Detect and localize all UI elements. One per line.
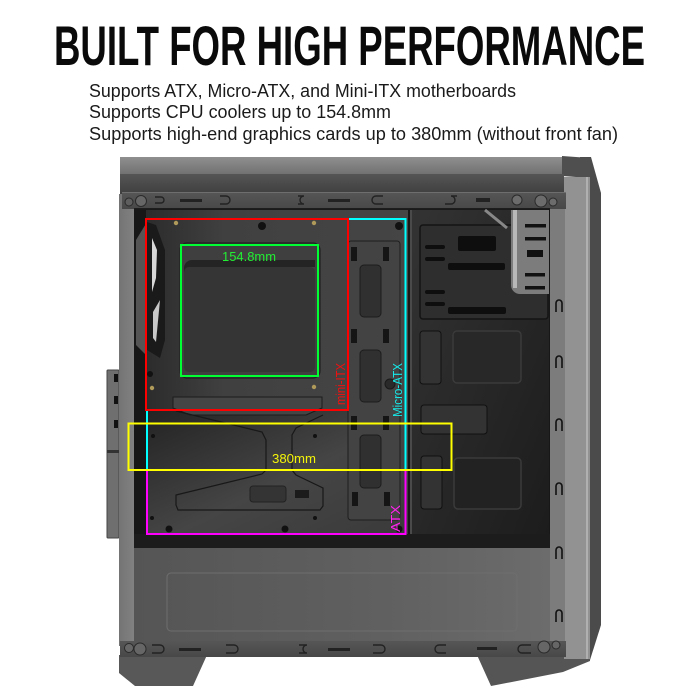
CPU cutout xyxy=(180,243,320,378)
Micro-ATX outline xyxy=(147,219,406,470)
feature: motherboards: Supports ATX, Micro-ATX, and Mini-ITX motherboards xyxy=(89,81,516,101)
top panel xyxy=(120,157,562,176)
ATX outline xyxy=(147,470,406,534)
right foot xyxy=(477,655,590,686)
CPU cooler outline xyxy=(181,245,318,376)
left foot xyxy=(119,655,207,686)
bottom rail xyxy=(120,641,566,657)
graphics card outline xyxy=(128,424,452,470)
label: 380mm: 380mm xyxy=(272,451,316,466)
mini-ITX outline xyxy=(146,219,348,410)
front bezel light band xyxy=(564,177,590,659)
PSU shroud xyxy=(134,548,550,642)
cable bracket xyxy=(485,210,549,294)
left expansion bracket xyxy=(107,370,119,538)
front slots xyxy=(556,300,562,622)
feature: CPU coolers: Supports CPU coolers up to 154.8mm xyxy=(89,102,391,122)
left rail column xyxy=(119,194,135,646)
feature list xyxy=(89,81,618,144)
label: ATX: ATX xyxy=(388,505,403,532)
drive bay section xyxy=(410,210,549,545)
upper tray cutout xyxy=(173,397,322,415)
mounting holes xyxy=(147,221,403,533)
right side strip xyxy=(580,157,601,662)
feature: graphics cards: Supports high-end graphics cards up to 380mm (without front fan) xyxy=(89,124,618,144)
right vertical panel xyxy=(348,241,400,520)
bottom vent strip xyxy=(134,534,550,549)
top rail xyxy=(122,192,566,210)
top inner panel xyxy=(120,174,564,194)
interior xyxy=(134,207,550,549)
top right corner xyxy=(562,156,590,178)
computer case xyxy=(107,156,601,686)
label: mini-ITX: mini-ITX xyxy=(333,363,348,405)
motherboard tray xyxy=(146,210,408,534)
front fan xyxy=(136,222,165,358)
center tray outline xyxy=(176,411,323,510)
label: 154.8mm: 154.8mm xyxy=(222,249,276,264)
label: Micro-ATX: Micro-ATX xyxy=(390,363,405,417)
right rail column xyxy=(549,194,565,644)
